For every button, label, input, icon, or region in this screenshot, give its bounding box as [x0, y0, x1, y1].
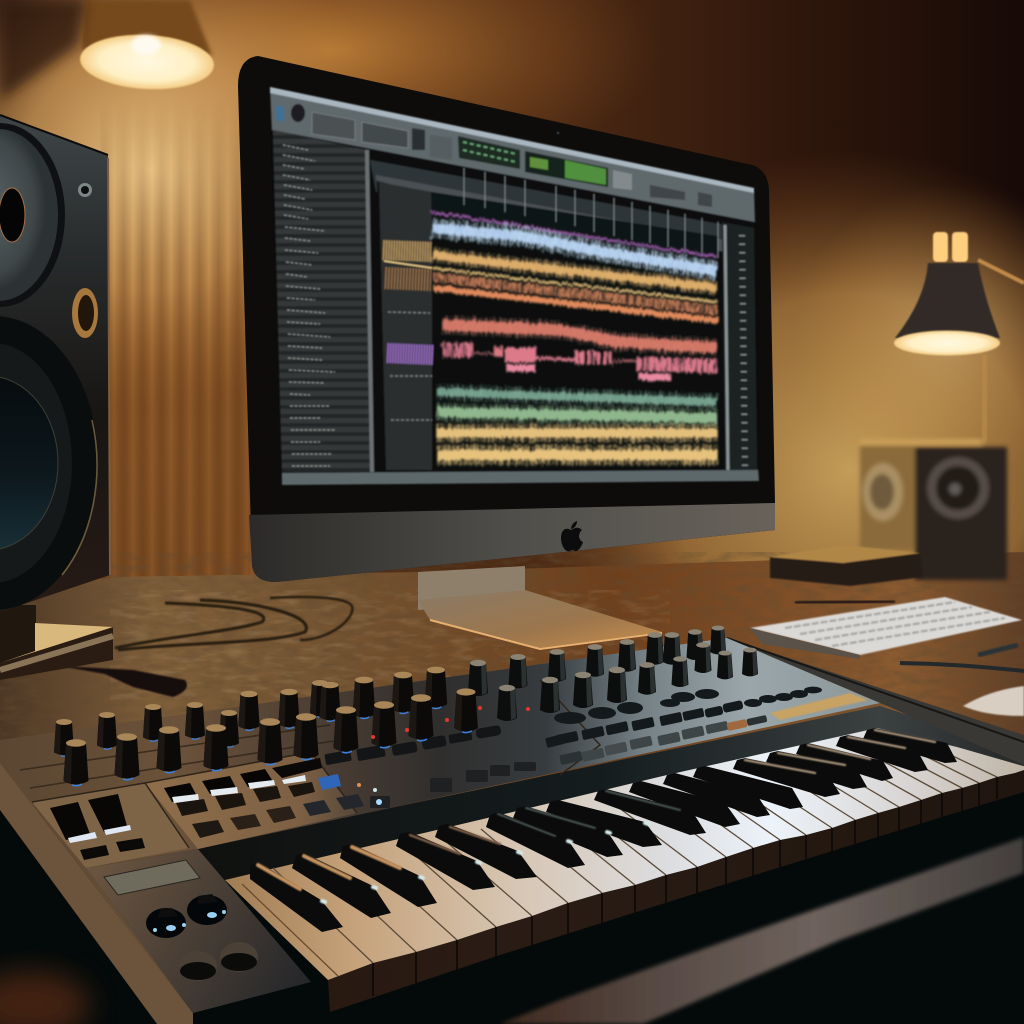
zone: pad panel [145, 752, 357, 849]
control panel [0, 638, 880, 1013]
panel mid buttons [324, 725, 536, 808]
wooden plank in foreground [500, 837, 1024, 1024]
status bar [282, 470, 759, 485]
monitor chin [249, 503, 775, 582]
black piano keys [250, 728, 957, 932]
waveform tracks [432, 212, 718, 455]
wall background [0, 0, 1024, 582]
black key highlights [258, 730, 935, 902]
lamp: right [795, 185, 1024, 485]
right rim [727, 638, 1024, 765]
pad row with light bars [164, 758, 364, 838]
track headers [378, 182, 435, 470]
red indicator lights [371, 706, 530, 739]
desk [0, 552, 1024, 820]
toolbar [270, 87, 755, 222]
keyboard lower shadow [0, 760, 1024, 1024]
rotary knobs back row [54, 625, 726, 756]
computer monitor [238, 56, 775, 582]
timeline grid [370, 160, 725, 258]
endless dome knobs [146, 894, 258, 981]
desk items: pens and slim keyboard [664, 597, 1024, 716]
piano key fronts [328, 770, 1024, 1012]
left studio monitor speaker [0, 115, 113, 680]
cable on desk [115, 597, 352, 650]
studio speaker: small, right [860, 439, 1007, 580]
microphone [60, 666, 187, 697]
mixer strip on right [722, 222, 757, 470]
monitor stand [418, 566, 662, 649]
file browser panel [273, 130, 372, 472]
fader buttons left [50, 794, 145, 860]
MIDI keyboard controller [0, 625, 1024, 1024]
white piano keys [225, 728, 1024, 980]
display [104, 860, 200, 895]
box on desk [770, 545, 923, 586]
zone: fader panel [32, 783, 189, 868]
lamp: top left [0, 0, 215, 100]
key dividers [242, 749, 997, 996]
zone dividers [32, 680, 600, 848]
silver panel buttons [545, 687, 822, 765]
zone: lower display panel [86, 849, 311, 1013]
gold label strip [770, 693, 868, 720]
key bed lip [198, 706, 1024, 882]
apple logo [561, 521, 583, 551]
rotary knobs front row [64, 642, 758, 786]
side strip [0, 763, 193, 1024]
lit stripes near knobs [20, 725, 340, 788]
screen: DAW application [270, 87, 759, 485]
